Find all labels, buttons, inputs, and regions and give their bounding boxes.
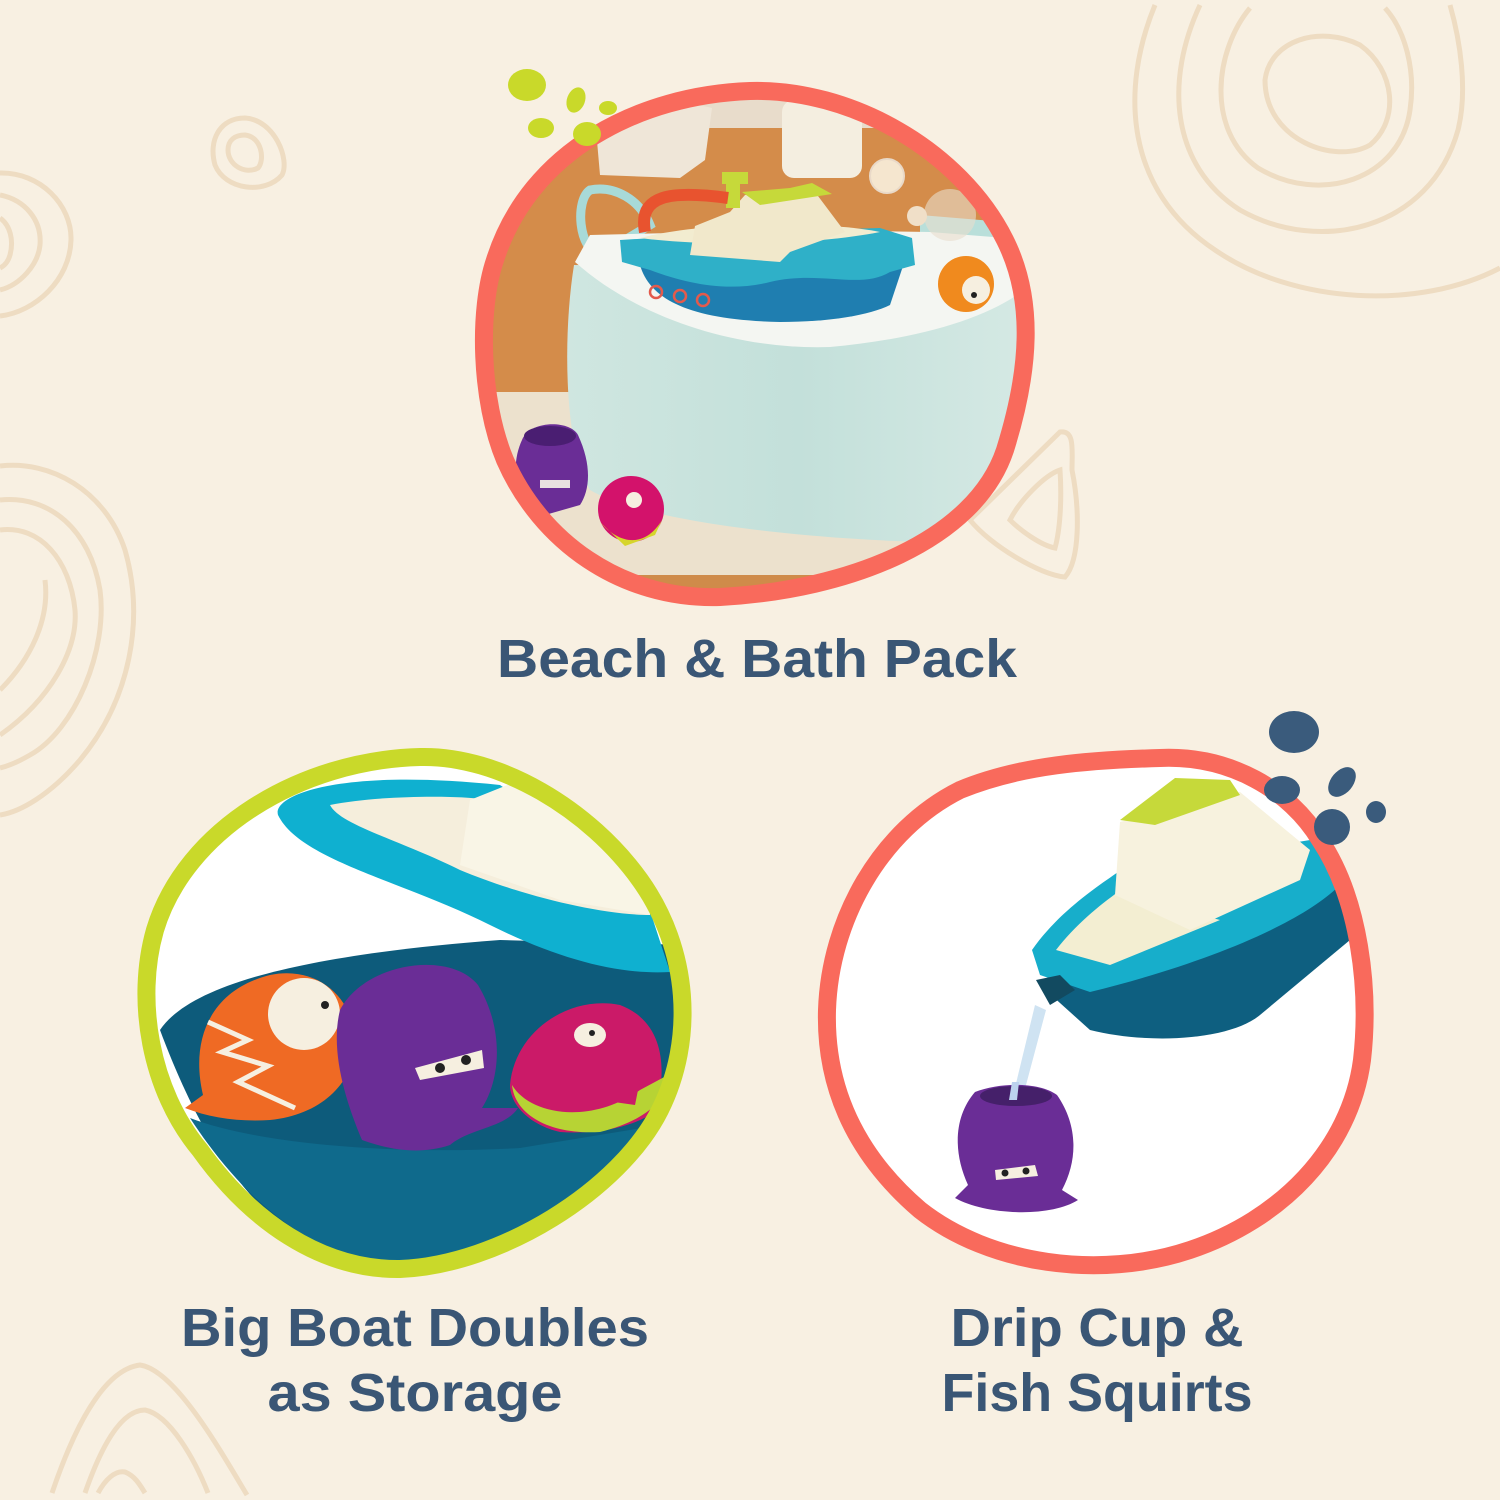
heading: drip cup and: Drip Cup & <box>950 1298 1244 1358</box>
panel: big boat doubles as storage photo <box>146 757 690 1270</box>
icon: navy splash dots <box>1264 711 1386 845</box>
cabin <box>1115 792 1310 930</box>
boat hull <box>160 940 674 1238</box>
water stream <box>1016 1005 1046 1086</box>
toy boat <box>640 267 902 322</box>
bubbles <box>870 159 904 193</box>
panel: drip cup and fish squirts photo <box>827 758 1365 1265</box>
icon: green splash dots <box>508 69 617 146</box>
pink pufferfish <box>598 476 664 542</box>
panel: beach and bath pack photo <box>470 80 1040 610</box>
heading: beach and bath pack: Beach & Bath Pack <box>497 629 1018 689</box>
heading: fish squirts: Fish Squirts <box>942 1363 1252 1423</box>
orange fish <box>185 973 356 1120</box>
hull <box>1040 885 1350 1038</box>
octopus cup <box>955 1085 1078 1212</box>
pink pufferfish <box>510 1003 665 1133</box>
boat deck lid <box>278 780 670 972</box>
heading: as storage: as Storage <box>268 1363 562 1423</box>
tub <box>567 265 1030 542</box>
rim <box>1032 840 1340 992</box>
heading: big boat doubles as storage: Big Boat Doubles <box>181 1298 649 1358</box>
purple octopus cup <box>516 424 588 515</box>
rug <box>496 392 906 575</box>
purple octopus <box>337 965 518 1150</box>
orange fish <box>938 256 994 312</box>
